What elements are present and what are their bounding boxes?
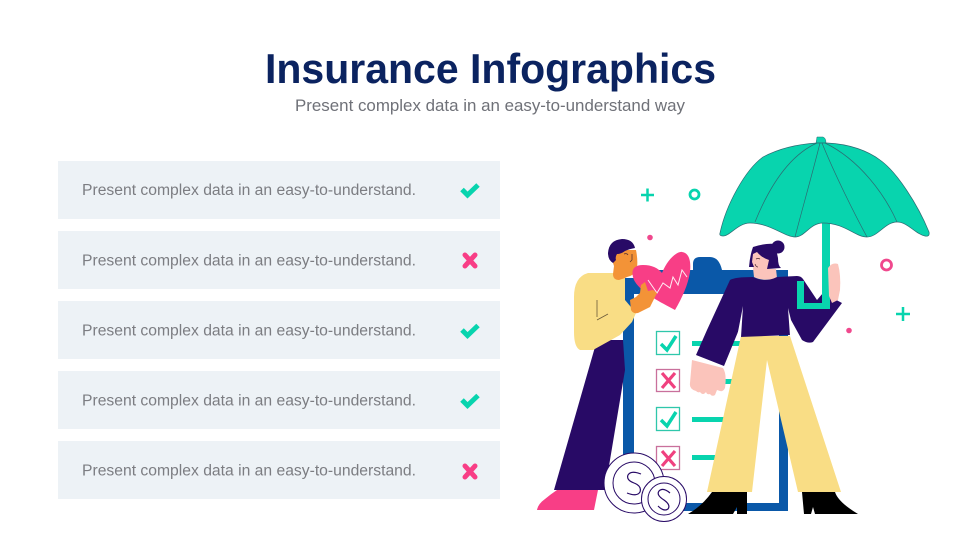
row 2 xyxy=(58,231,500,289)
row 4: Present complex data in an easy-to-understand. xyxy=(82,392,416,410)
man xyxy=(537,239,637,510)
umbrella xyxy=(720,137,929,309)
illustration: insurance scene xyxy=(537,137,929,522)
heart with pulse xyxy=(630,252,690,313)
row 3: Present complex data in an easy-to-understand. xyxy=(82,322,416,340)
woman xyxy=(688,240,858,514)
title: Insurance Infographics xyxy=(265,45,716,92)
subtitle: Present complex data in an easy-to-understand way xyxy=(295,96,685,115)
row 4 xyxy=(58,371,500,429)
row 1 xyxy=(58,161,500,219)
row 3 xyxy=(58,301,500,359)
row 5 xyxy=(58,441,500,499)
clipboard xyxy=(623,257,788,511)
coins xyxy=(604,453,686,522)
row 5: Present complex data in an easy-to-understand. xyxy=(82,462,416,480)
row 2: Present complex data in an easy-to-understand. xyxy=(82,252,416,270)
checklist items xyxy=(656,332,741,470)
woman's hand on umbrella xyxy=(828,264,840,303)
panel: checklist rows xyxy=(58,161,500,499)
decorative sparkles xyxy=(641,188,910,333)
row 1: Present complex data in an easy-to-understand. xyxy=(82,182,416,199)
